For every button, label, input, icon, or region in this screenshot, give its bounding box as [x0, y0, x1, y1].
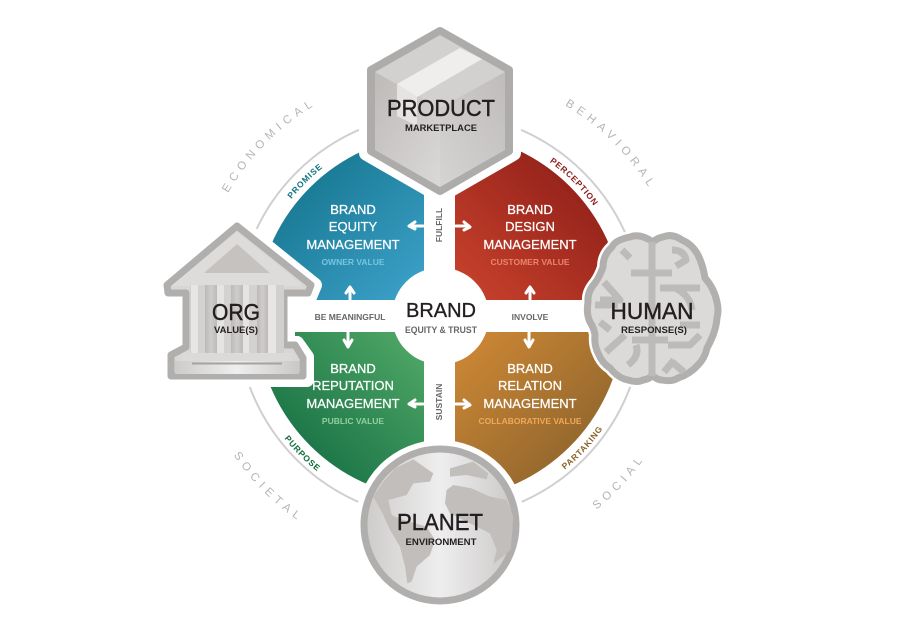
arrow: fulfill right: [456, 222, 470, 230]
panel: brand reputation management: BRAND: [330, 361, 376, 376]
arrow: involve down: [525, 333, 533, 347]
arrow: be meaningful down: [344, 333, 352, 347]
icon: human brain: [587, 236, 718, 382]
title: org: ORG: [212, 299, 260, 325]
title: human: HUMAN: [610, 298, 694, 324]
title: planet: PLANET: [397, 509, 483, 535]
centre: brand equity and trust: [392, 268, 489, 364]
panel: brand reputation management: [257, 332, 424, 498]
panel: brand equity management: [257, 135, 424, 300]
label: societal: SOCIETAL: [234, 452, 298, 520]
label: involve: INVOLVE: [512, 312, 549, 322]
icon: planet globe: [355, 440, 525, 610]
arrow: sustain right: [456, 400, 470, 408]
label: partaking: PARTAKING: [562, 426, 602, 470]
panel: brand design management: MANAGEMENT: [483, 237, 577, 252]
label: be meaningful: BE MEANINGFUL: [315, 312, 385, 322]
label: perception: PERCEPTION: [550, 158, 598, 206]
label: social: SOCIAL: [592, 460, 642, 508]
panel: brand equity management: OWNER VALUE: [321, 257, 385, 267]
outer ring: [237, 113, 643, 519]
panel: brand design management: [455, 134, 623, 300]
panel: brand design management: CUSTOMER VALUE: [490, 257, 570, 267]
panel: brand relation management: [455, 332, 623, 499]
panel: brand relation management: COLLABORATIVE VALUE: [478, 416, 582, 426]
icon: product box: [367, 27, 513, 195]
label: behavioral: BEHAVIORAL: [566, 99, 652, 186]
subtitle: value(s): VALUE(S): [214, 325, 258, 335]
label: purpose: PURPOSE: [284, 435, 320, 471]
label: sustain: SUSTAIN: [434, 384, 444, 420]
panel: brand design management: BRAND: [507, 202, 553, 217]
arrow: involve up: [526, 287, 534, 299]
panel: brand equity management: MANAGEMENT: [306, 237, 400, 252]
label: economical: ECONOMICAL: [222, 102, 312, 192]
label: fulfill: FULFILL: [434, 208, 444, 242]
panel: brand design management: DESIGN: [505, 219, 555, 234]
panel: brand equity management: EQUITY: [329, 219, 378, 234]
centre: brand equity and trust: BRAND: [406, 300, 476, 322]
subtitle: environment: ENVIRONMENT: [406, 537, 477, 547]
arrow: be meaningful up: [346, 287, 354, 299]
icon: org temple: [163, 222, 315, 380]
panel: brand relation management: RELATION: [498, 378, 562, 393]
arrow: sustain left: [409, 400, 423, 407]
subtitle: marketplace: MARKETPLACE: [405, 123, 477, 133]
subtitle: response(s): RESPONSE(S): [621, 325, 687, 335]
panel: brand reputation management: REPUTATION: [312, 378, 394, 393]
panel: brand equity management: BRAND: [330, 202, 376, 217]
arrow: fulfill left: [409, 222, 423, 229]
panel: brand relation management: MANAGEMENT: [483, 396, 577, 411]
panel: brand reputation management: PUBLIC VALUE: [322, 416, 384, 426]
title: product: PRODUCT: [387, 95, 495, 121]
panel: brand relation management: BRAND: [507, 361, 553, 376]
centre: brand equity and trust: EQUITY & TRUST: [405, 325, 477, 335]
panel: brand reputation management: MANAGEMENT: [306, 396, 400, 411]
label: promise: PROMISE: [287, 164, 322, 199]
